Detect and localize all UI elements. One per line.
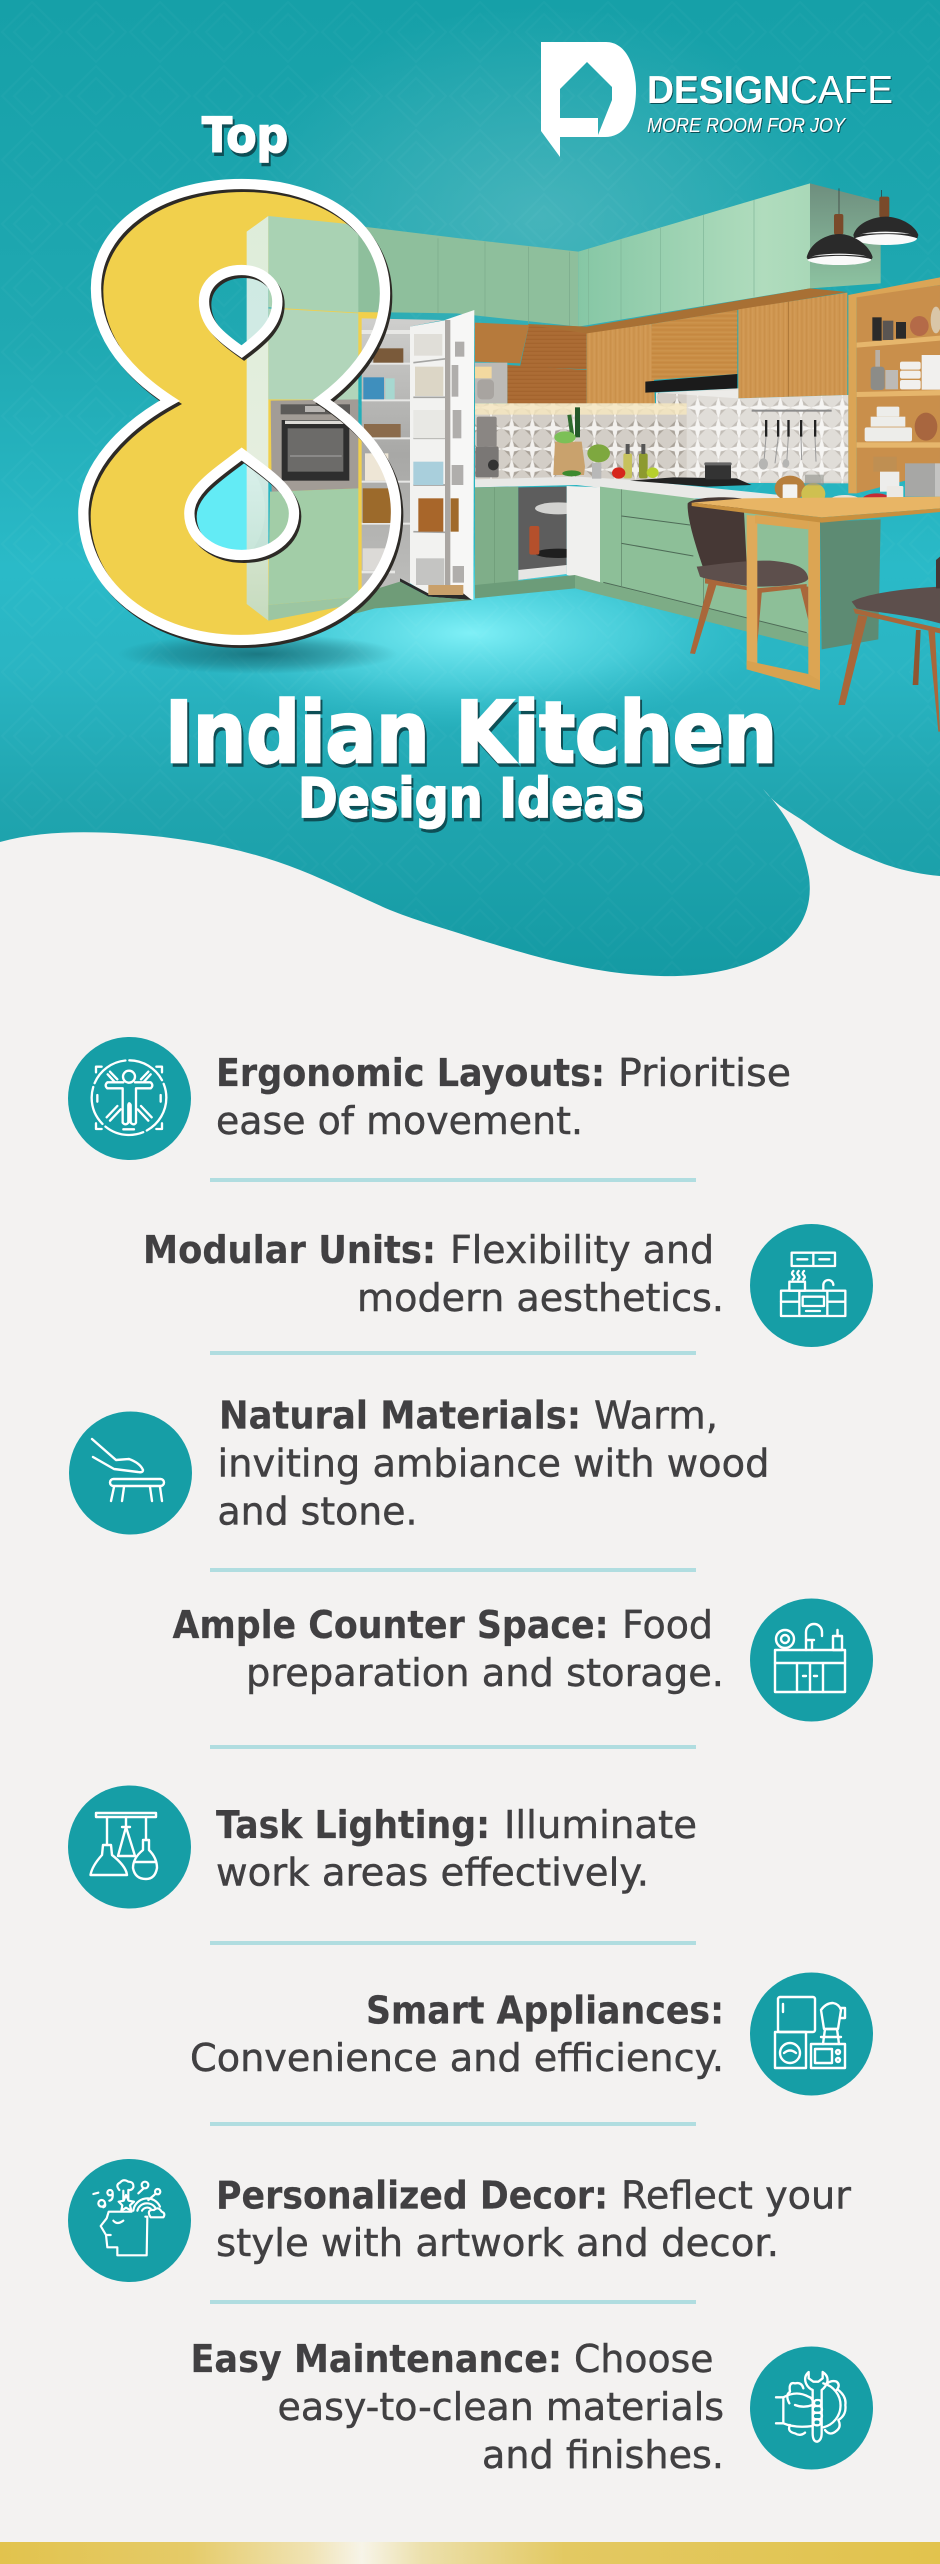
logo: DesignCafe: [541, 42, 893, 157]
logo wordmark: DESIGN: [647, 69, 790, 112]
soffit wood strip: [528, 288, 847, 334]
text: [216, 1803, 697, 1894]
text: Ample Counter Space:: [172, 1603, 608, 1647]
icon: counter with tap: [750, 1598, 873, 1722]
tall unit upper door: [268, 216, 358, 313]
text: inviting ambiance with wood: [218, 1442, 770, 1486]
text: style with artwork and decor.: [216, 2221, 779, 2265]
icon: appliances: [750, 1972, 873, 2096]
item 4: Ample Counter Space: [172, 1598, 873, 1722]
text: ease of movement.: [216, 1099, 583, 1143]
under-cabinet light: [475, 403, 687, 415]
left upper cabinets: [358, 226, 578, 327]
backsplash tiles: [475, 393, 848, 483]
lamp front: [807, 188, 873, 265]
pantry door: [445, 310, 474, 600]
item 5: Task Lighting: [68, 1786, 697, 1908]
icon: vitruvian figure: [68, 1037, 191, 1160]
item 8: Easy Maintenance: [190, 2337, 873, 2477]
text: preparation and storage.: [246, 1651, 724, 1695]
wood overhead units: [587, 324, 655, 404]
text: Task Lighting:: [216, 1803, 490, 1847]
sack with greens: [553, 407, 585, 476]
text: Warm,: [594, 1394, 718, 1438]
base left: [475, 487, 518, 585]
text: Easy Maintenance:: [190, 2337, 562, 2381]
item 1: Ergonomic Layouts: [68, 1037, 791, 1160]
pot: [704, 462, 732, 479]
icon: head with ideas: [68, 2159, 191, 2282]
upper side panel: [810, 183, 881, 288]
icon: hand on table: [69, 1412, 192, 1534]
text: Prioritise: [618, 1051, 791, 1095]
heading: Design Ideas: Design Ideas: [298, 767, 644, 830]
plinth: [475, 575, 575, 598]
blender: [475, 417, 499, 477]
text: modern aesthetics.: [357, 1276, 724, 1320]
worktop: [475, 477, 780, 501]
item 6: Smart Appliances: [190, 1972, 873, 2096]
text: [172, 1603, 724, 1695]
oven: [271, 399, 358, 492]
shelf plates: [865, 407, 912, 441]
base right run: [600, 487, 820, 650]
upper cabinets and wood units: [358, 183, 940, 508]
right upper cabinets: [578, 183, 810, 327]
tall unit plinth: [268, 597, 358, 621]
corner carousel cabinet: [518, 487, 567, 580]
chair 1 legs: [690, 584, 808, 654]
text: Convenience and efficiency.: [190, 2036, 724, 2080]
item 7: Personalized Decor: [68, 2159, 851, 2282]
herb pot: [587, 444, 610, 479]
shadow under big 8: [118, 634, 398, 674]
tall unit and pantry: [247, 216, 474, 621]
pull-out base: [400, 578, 472, 600]
pantry plinth: [350, 582, 473, 615]
heading: Indian Kitchen: Indian Kitchen: [165, 684, 777, 783]
logo wordmark: CAFE: [790, 69, 893, 112]
text: and stone.: [218, 1490, 418, 1534]
bottom gold band: [0, 2542, 940, 2564]
logo wordmark: [647, 69, 893, 112]
text: [143, 1228, 724, 1320]
pull-out rack: [400, 320, 447, 595]
white wave area under hero: [0, 789, 940, 1000]
base cabinets, table and chairs: [475, 486, 940, 732]
outline white: [83, 184, 396, 640]
text: Reflect your: [621, 2174, 851, 2218]
big number 8 yellow fill: [83, 184, 396, 640]
pantry interior: [362, 318, 443, 591]
shelf jars and decor: [872, 317, 906, 341]
text: and finishes.: [482, 2433, 724, 2477]
text: Illuminate: [504, 1803, 697, 1847]
text: [190, 2337, 724, 2477]
text: Flexibility and: [450, 1228, 714, 1272]
tall unit lower door: [268, 488, 358, 605]
cyan tint seen through lower hole of 8: [165, 450, 265, 570]
oil bottles: [623, 444, 648, 478]
heading: Top: Top: [202, 108, 288, 164]
text: [190, 1988, 724, 2080]
text: easy-to-clean materials: [278, 2385, 724, 2429]
item 3: Natural Materials: [69, 1394, 770, 1534]
hero banner background: [0, 0, 940, 980]
outline shadow: [86, 187, 398, 643]
icon: pendant lights: [68, 1786, 191, 1908]
text: Choose: [574, 2337, 714, 2381]
table top: [692, 497, 940, 517]
text: [218, 1394, 770, 1534]
logo tagline: MORE ROOM FOR JOY: [647, 115, 846, 137]
tall unit side: [247, 216, 268, 621]
open niche: [475, 363, 507, 403]
pendant lamps: [807, 188, 918, 265]
icon: hand with wrench and gear: [750, 2346, 873, 2470]
text: Natural Materials:: [219, 1394, 581, 1438]
text: Ergonomic Layouts:: [216, 1051, 605, 1095]
chair 1 seat: [697, 561, 808, 587]
logo mark: [541, 42, 636, 157]
kitchen illustration: [247, 183, 940, 732]
utensil rail: [752, 410, 832, 470]
open shelf unit: [848, 277, 940, 497]
lamp rear: [853, 190, 918, 245]
text: Personalized Decor:: [216, 2174, 608, 2218]
chair 2: [838, 557, 940, 732]
item 2: Modular Units: [143, 1224, 873, 1347]
text: work areas effectively.: [216, 1850, 649, 1894]
big number 8 outline: [83, 184, 398, 643]
table frame: [747, 515, 820, 690]
text: Modular Units:: [143, 1228, 436, 1272]
pantry shelf contents: [362, 330, 410, 573]
text: [216, 1051, 791, 1143]
angled wood panel: [520, 325, 587, 369]
text: Smart Appliances:: [366, 1988, 724, 2032]
range hood: [645, 374, 737, 393]
lower shelf canisters: [873, 457, 897, 472]
peppers: [612, 467, 659, 479]
tall unit middle door: [268, 308, 358, 400]
icon: modular kitchen: [750, 1224, 873, 1347]
chair 1 back: [688, 497, 747, 568]
text: [216, 2174, 851, 2265]
stove: [630, 477, 752, 487]
text: Food: [622, 1603, 713, 1647]
tabletop crockery: [775, 475, 903, 508]
